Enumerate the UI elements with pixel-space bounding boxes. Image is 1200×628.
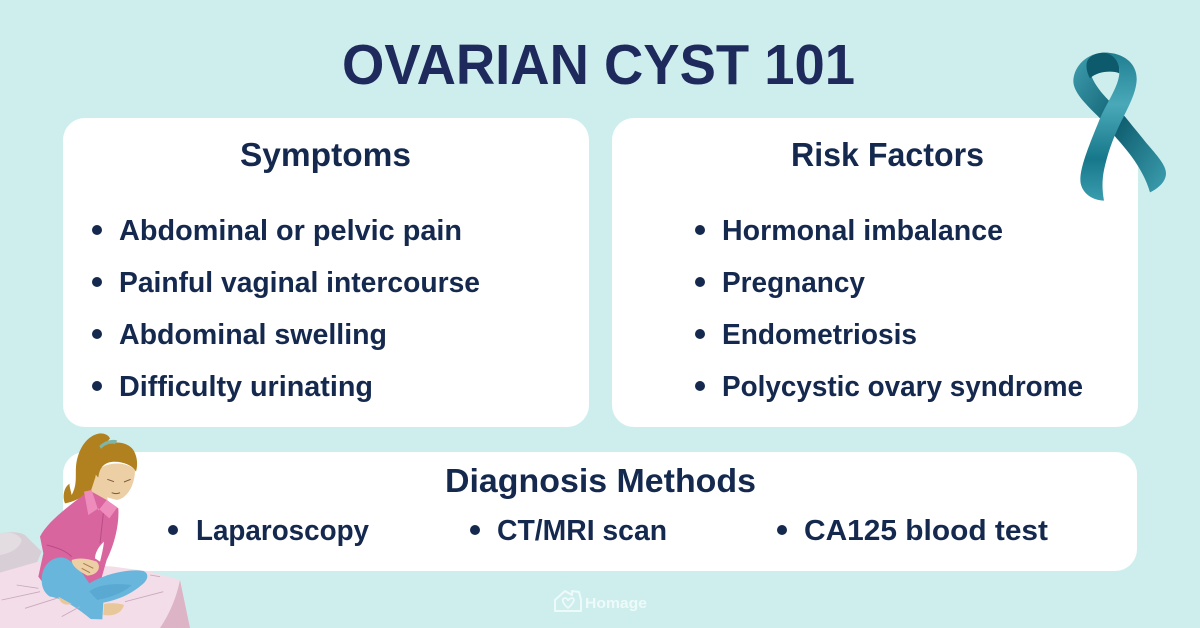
pink shirt xyxy=(38,492,118,585)
diagnosis list: CT/MRI scan xyxy=(497,515,667,547)
heading: risk factors: Risk Factors xyxy=(791,136,984,173)
heading: symptoms: Symptoms xyxy=(240,136,411,173)
blue trousers xyxy=(42,557,147,619)
bed xyxy=(0,562,190,628)
icon: teal awareness ribbon xyxy=(1073,53,1166,201)
symptoms list: Abdominal or pelvic pain xyxy=(119,215,462,247)
risk factors list: Pregnancy xyxy=(722,267,865,299)
illustration: woman with abdominal pain sitting on bed xyxy=(0,433,190,628)
face and neck xyxy=(91,464,135,517)
ponytail xyxy=(64,433,110,503)
risk factors list: Endometriosis xyxy=(722,319,917,351)
gap under arm xyxy=(95,542,104,562)
symptoms list: Abdominal swelling xyxy=(119,319,387,351)
bed pillow xyxy=(0,532,42,573)
logo: Homage xyxy=(555,591,647,612)
logo: Homage: Homage xyxy=(585,595,647,612)
symptoms list: Painful vaginal intercourse xyxy=(119,267,480,299)
diagnosis list: CA125 blood test xyxy=(804,515,1048,547)
symptoms list xyxy=(92,215,480,403)
panel: diagnosis methods xyxy=(63,452,1137,571)
hands xyxy=(72,558,99,576)
symptoms list: Difficulty urinating xyxy=(119,371,373,403)
risk factors list: Hormonal imbalance xyxy=(722,215,1003,247)
bed wrinkles xyxy=(2,575,163,617)
hair xyxy=(94,442,137,477)
title: OVARIAN CYST 101 xyxy=(342,33,855,97)
risk factors list: Polycystic ovary syndrome xyxy=(722,371,1083,403)
panel: symptoms xyxy=(63,118,589,427)
icon: house with heart xyxy=(555,591,581,611)
risk factors list xyxy=(695,215,1083,403)
panel: risk factors xyxy=(612,118,1138,427)
feet xyxy=(58,597,72,605)
face details xyxy=(107,479,131,494)
shirt collar xyxy=(84,490,117,518)
diagnosis list: Laparoscopy xyxy=(196,515,369,547)
diagnosis list xyxy=(168,515,1048,547)
heading: diagnosis methods: Diagnosis Methods xyxy=(445,462,756,499)
hair band xyxy=(99,440,117,449)
